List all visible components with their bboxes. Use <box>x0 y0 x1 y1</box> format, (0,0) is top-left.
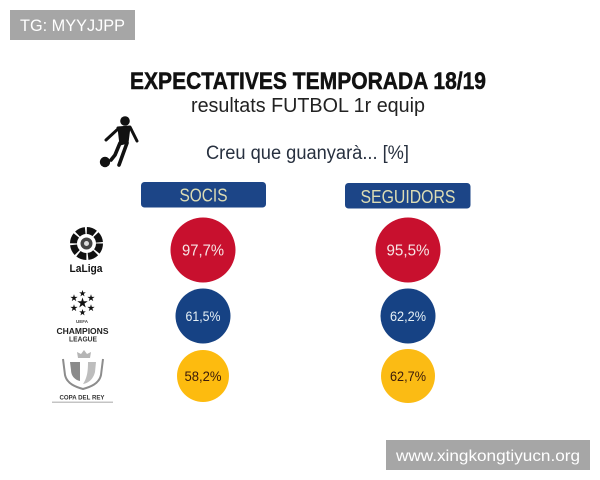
watermark: bottom right: www.xingkongtiyucn.org <box>395 448 580 465</box>
stat: SOCIS LaLiga <box>170 218 236 282</box>
watermark: top left: TG: MYYJJPP <box>20 17 125 35</box>
logo: Champions League: UEFA <box>76 319 89 324</box>
icon: football player <box>100 116 137 167</box>
logo: LaLiga <box>70 230 103 275</box>
column header: SOCIS <box>141 182 266 208</box>
logo: Copa del Rey <box>52 350 113 403</box>
logo: Copa del Rey: COPA DEL REY <box>60 394 105 402</box>
logo: Champions League: CHAMPIONS <box>56 327 109 336</box>
title: EXPECTATIVES TEMPORADA 18/19 <box>130 68 486 95</box>
subtitle: resultats FUTBOL 1r equip <box>191 95 425 117</box>
logo: Champions League <box>56 290 109 344</box>
stat: SEGUIDORS Champions: 62,2% <box>390 308 426 324</box>
logo: LaLiga: LaLiga <box>70 263 103 275</box>
stat: SEGUIDORS Copa: 62,7% <box>390 368 426 384</box>
stat: SEGUIDORS LaLiga <box>376 218 440 282</box>
stat: SEGUIDORS Champions <box>380 288 436 344</box>
stat: SOCIS Copa <box>177 350 229 402</box>
stat: SOCIS LaLiga: 97,7% <box>182 242 224 260</box>
stat: SOCIS Champions <box>176 288 230 344</box>
logo: Champions League: LEAGUE <box>69 336 97 344</box>
question text: Creu que guanyarà... [%] <box>206 143 409 164</box>
watermark: top left <box>10 10 135 40</box>
stat: SOCIS Copa: 58,2% <box>184 368 222 384</box>
column header: SEGUIDORS <box>345 183 470 208</box>
stat: SEGUIDORS LaLiga: 95,5% <box>386 242 430 260</box>
column header: SEGUIDORS: SEGUIDORS <box>360 187 456 207</box>
stat: SEGUIDORS Copa <box>381 349 435 403</box>
column header: SOCIS: SOCIS <box>180 186 228 206</box>
watermark: bottom right <box>386 440 590 470</box>
stat: SOCIS Champions: 61,5% <box>186 308 220 324</box>
